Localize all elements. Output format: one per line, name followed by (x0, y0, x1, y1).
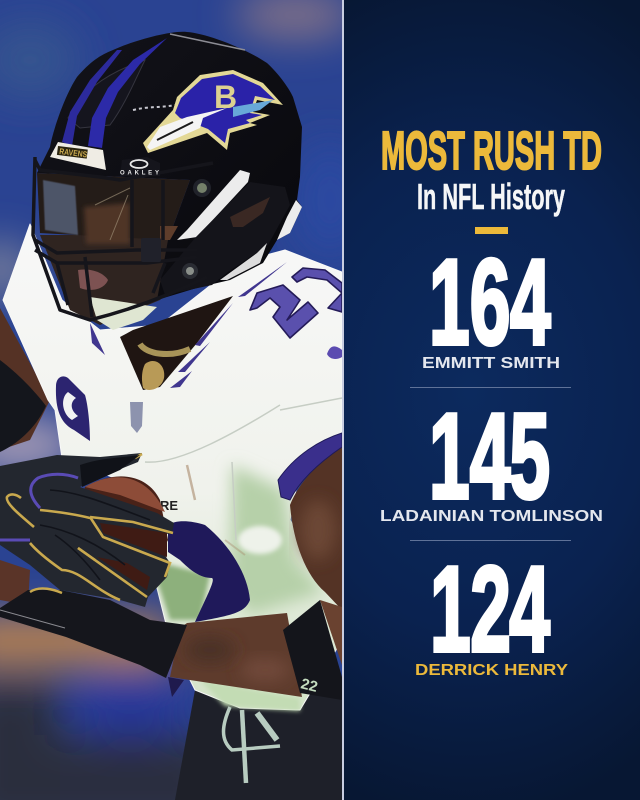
ravens bumper (50, 142, 106, 170)
NFL shield (130, 402, 143, 433)
facemask (33, 157, 213, 320)
white jersey: RE (160, 498, 178, 513)
stat: LaDainian Tomlinson (380, 389, 603, 525)
jersey number 22 on shoulder (250, 268, 342, 338)
number 124: 124 (430, 542, 550, 678)
helmet shell (37, 32, 302, 300)
number 164: 164 (429, 235, 551, 371)
jaw plate (160, 182, 290, 295)
ravens logo (143, 70, 283, 153)
lower face (40, 235, 168, 325)
accent bar (475, 227, 508, 234)
stat: Derrick Henry (415, 542, 569, 679)
left arm (0, 308, 50, 452)
visor (37, 173, 190, 240)
wristband (283, 600, 342, 700)
blurred stadium background (0, 0, 370, 800)
neck and collar (120, 296, 233, 390)
purple sleeve cuff (278, 433, 342, 500)
fingertips under glove (0, 560, 30, 605)
glove finger creases (40, 490, 150, 580)
stat: Emmitt Smith (422, 235, 560, 372)
glove gold trim (7, 454, 173, 600)
helmet vent (68, 60, 145, 128)
rear white trim (277, 200, 302, 240)
visor highlight (170, 34, 245, 50)
gold chain (140, 344, 190, 390)
ravens bumper: RAVENS (59, 146, 88, 159)
helmet (33, 32, 302, 330)
left hand glove (0, 453, 174, 607)
white jersey (3, 224, 342, 711)
ball visible between fingers (100, 523, 167, 557)
chin strap (90, 297, 157, 330)
wristband: 22 (299, 675, 319, 696)
name: DERRICK HENRY (415, 662, 569, 679)
right arm (290, 445, 342, 610)
ravens logo: B (214, 79, 237, 115)
name: LADAINIAN TOMLINSON (380, 508, 603, 525)
number 145: 145 (429, 389, 550, 525)
helmet blue stripes (62, 50, 122, 146)
captain patch (56, 376, 90, 441)
pants (175, 690, 342, 800)
right hand glove (0, 588, 187, 697)
jersey collar stripes and logo (90, 262, 342, 388)
forearm (170, 613, 302, 697)
purple inner sleeve (168, 521, 250, 622)
panel: stats background (344, 0, 640, 800)
glove purple trim (0, 474, 78, 540)
oakley logo (120, 157, 160, 176)
name: EMMITT SMITH (422, 355, 560, 372)
football (84, 476, 168, 542)
photo edge line (342, 0, 344, 800)
white side plate (177, 170, 250, 240)
panel: player photo (0, 0, 370, 800)
oakley logo: OAKLEY (120, 170, 159, 176)
waist laces (224, 707, 280, 783)
